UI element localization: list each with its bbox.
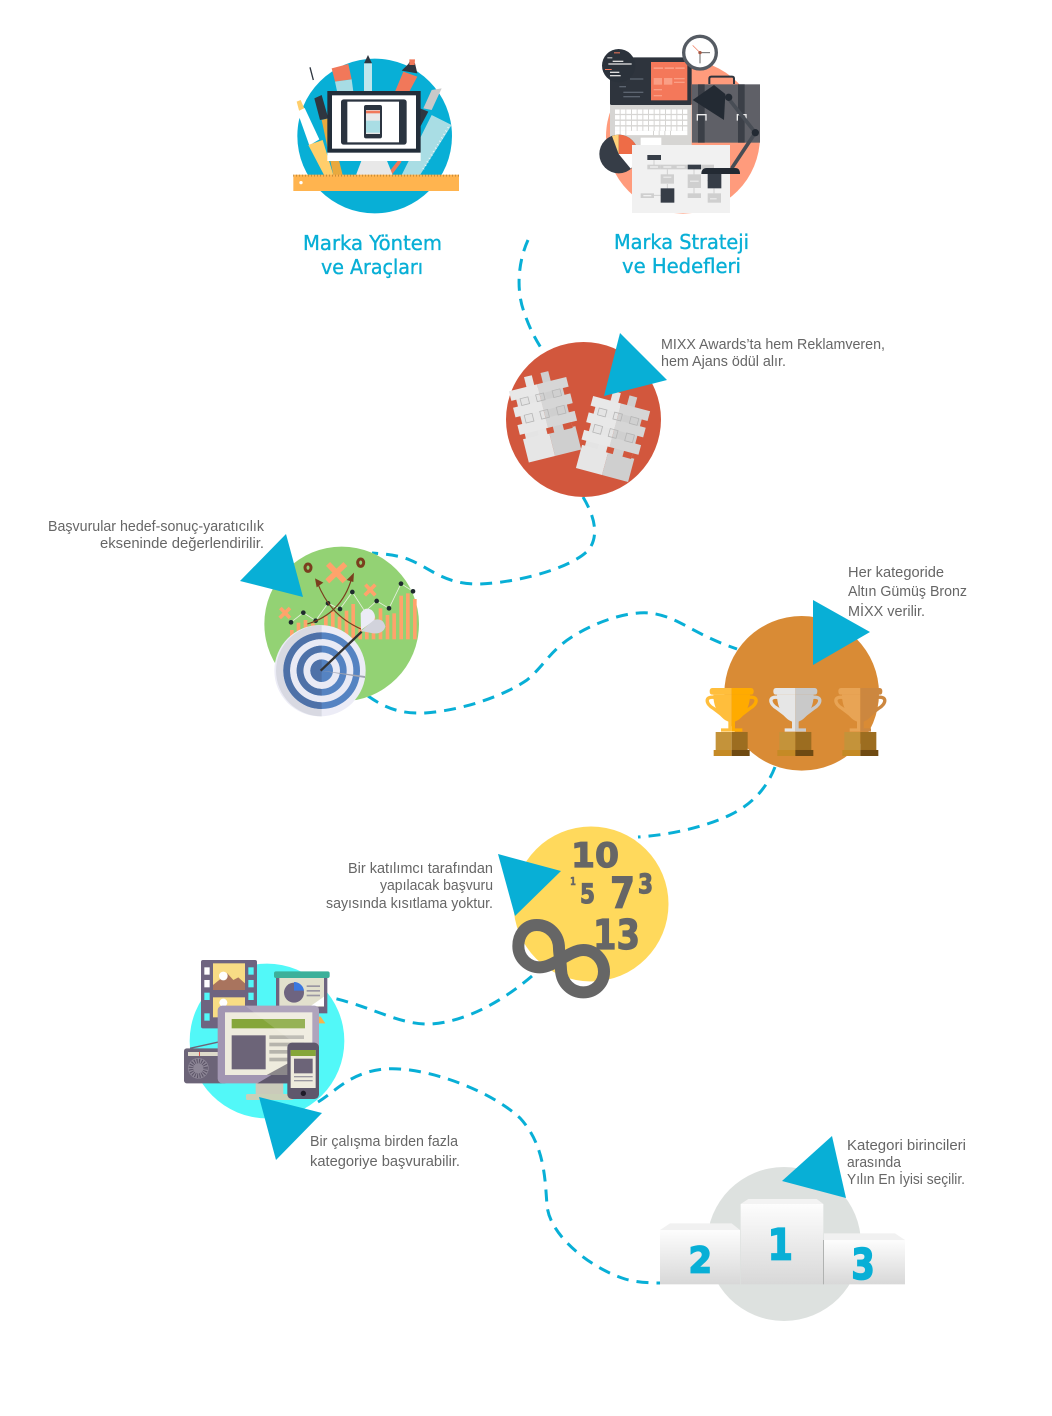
icon: ruler (293, 175, 459, 191)
icon: left building (507, 367, 584, 463)
text: best of the year (847, 1138, 966, 1188)
numbers: 5 (580, 879, 595, 910)
text: multi-category entries: kategoriye başvurabilir. (310, 1154, 460, 1170)
icon: radio (184, 1042, 227, 1083)
blue pointer triangles (240, 333, 870, 1198)
icon: smartphone (287, 1043, 319, 1099)
icon: infinity (518, 925, 604, 992)
icon: presentation board (274, 971, 330, 1023)
text: MIXX Awards (661, 337, 885, 370)
text: no limit on entries: Bir katılımcı tarafından (348, 861, 493, 877)
text: awards per category: Altın Gümüş Bronz (848, 584, 967, 600)
podium number 1: 1 (768, 1220, 793, 1270)
text: best of the year: Kategori birincileri (847, 1138, 966, 1154)
text: evaluation: ekseninde değerlendirilir. (100, 536, 264, 552)
text: multi-category entries (310, 1134, 460, 1170)
icon: org chart sheet (632, 145, 730, 213)
icon: desk lamp (693, 85, 759, 174)
text: best of the year: Yılın En İyisi seçilir. (847, 1170, 965, 1188)
numbers: 7 (610, 869, 635, 919)
icon: briefcase (692, 77, 760, 143)
icon: podium (660, 1199, 905, 1289)
heading: Marka Yöntem ve Araçları: ve Araçları (321, 255, 423, 279)
text: no limit on entries: yapılacak başvuru (380, 878, 493, 894)
text: multi-category entries: Bir çalışma birden fazla (310, 1134, 459, 1150)
panel: Marka Strateji ve Hedefleri icon (599, 36, 760, 214)
podium number 2: 2 (689, 1241, 712, 1282)
icon: dart (321, 609, 385, 671)
icon: gold trophy (707, 688, 756, 756)
icon: pencils and tools (297, 55, 452, 175)
text: awards per category (848, 565, 967, 620)
dashed connector path (318, 240, 775, 1283)
panel: Marka Yöntem ve Araçları icon (293, 55, 459, 213)
numbers: 3 (638, 869, 653, 900)
text: no limit on entries: sayısında kısıtlama yoktur. (326, 896, 493, 912)
numbers: 13 (593, 911, 640, 959)
line chart (289, 581, 415, 625)
text: awards per category: MİXX verilir. (848, 602, 925, 620)
podium number 3: 3 (851, 1240, 875, 1289)
heading: Marka Strateji ve Hedefleri: Marka Strateji (614, 230, 749, 254)
icon: target board (274, 625, 366, 716)
icon: bronze trophy (836, 688, 885, 756)
heading: Marka Strateji ve Hedefleri: ve Hedefleri (622, 254, 741, 278)
icon: desktop monitor (218, 1006, 319, 1100)
numbers: 10 (571, 836, 619, 876)
text: MIXX Awards: hem Ajans ödül alır. (661, 354, 786, 370)
icon: code badge (602, 49, 635, 82)
icon: clock (684, 36, 716, 69)
icon: monitor with tablet and phone (327, 91, 421, 175)
panel: trophies circle (707, 616, 885, 771)
icon: right building (574, 386, 653, 483)
panel: media circle (184, 960, 344, 1118)
icon: tactic arrows and marks (281, 559, 374, 629)
icon: silver trophy (771, 688, 820, 756)
icon: pie chart (599, 135, 638, 173)
panel: MIXX Awards circle with buildings (506, 342, 661, 497)
icon: film strip (201, 960, 257, 1028)
panel: numbers circle (514, 826, 668, 992)
text: MIXX Awards: MIXX Awards’ta hem Reklamveren, (661, 337, 885, 353)
heading: Marka Yöntem ve Araçları: Marka Yöntem (303, 231, 442, 255)
text: best of the year: arasında (847, 1155, 902, 1171)
text: no limit on entries (326, 861, 493, 912)
text: awards per category: Her kategoride (848, 565, 944, 581)
heading: Marka Yöntem ve Araçları (303, 231, 442, 279)
text: evaluation: Başvurular hedef-sonuç-yaratıcılık (48, 519, 265, 535)
heading: Marka Strateji ve Hedefleri (614, 230, 749, 278)
numbers: 1 (570, 875, 576, 888)
icon: laptop (610, 57, 692, 146)
panel: podium circle (660, 1167, 905, 1321)
panel: target circle (264, 547, 419, 716)
numbers (570, 836, 653, 959)
bar chart (290, 593, 417, 640)
text: evaluation (48, 519, 265, 552)
